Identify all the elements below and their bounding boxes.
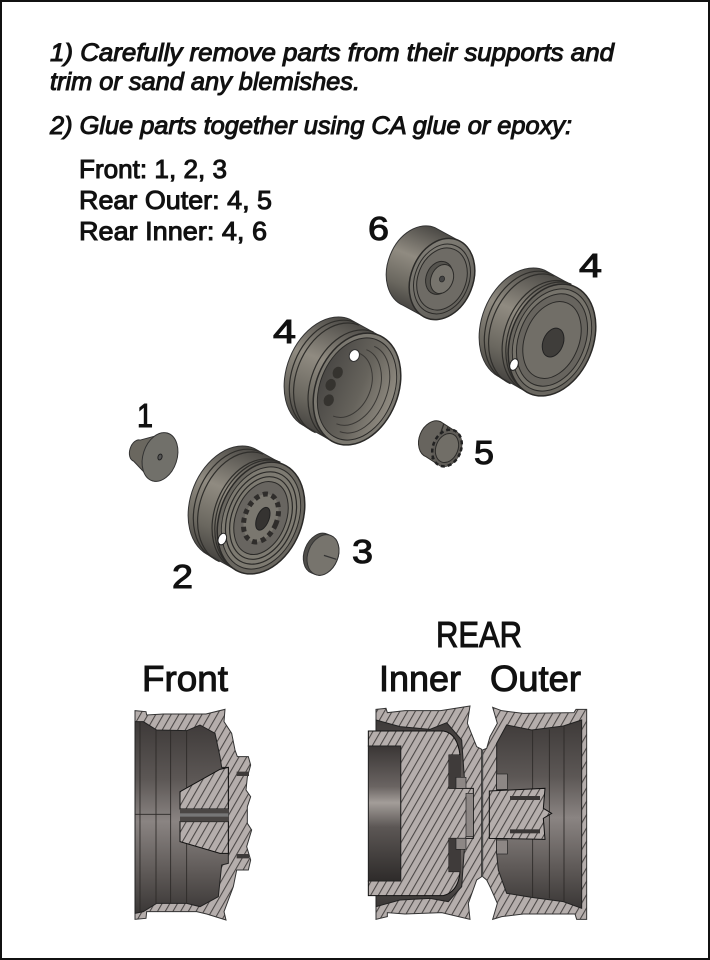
glue groups list: Rear Inner: 4, 6 [79, 216, 267, 246]
label 5: 5 [474, 434, 494, 471]
part 4: rear wheel, face side [462, 255, 613, 409]
front wheel cross-section [135, 709, 252, 920]
heading Front: Front [142, 658, 228, 699]
step 2 text: 2) Glue parts together using CA glue or epoxy: [49, 112, 572, 140]
rear hub section [489, 788, 552, 839]
part 1: front cone [123, 424, 184, 486]
label 6: 6 [368, 210, 389, 247]
heading Inner: Inner [379, 658, 461, 699]
glue groups list [79, 154, 272, 246]
heading REAR: REAR [436, 614, 522, 655]
label 3: 3 [352, 533, 373, 570]
step 1 text [50, 39, 615, 96]
glue groups list: Front: 1, 2, 3 [79, 154, 227, 184]
label 1: 1 [137, 397, 153, 434]
heading Outer: Outer [490, 658, 581, 699]
open rim and interior [297, 320, 417, 458]
step 1 text: trim or sand any blemishes. [50, 68, 360, 96]
part 3: front cap [298, 528, 345, 580]
label 4 right: 4 [579, 247, 602, 284]
part 5: outer hub [412, 416, 468, 471]
rear inner wheel cross-section [368, 706, 482, 919]
part number labels [137, 210, 602, 595]
label 2: 2 [172, 558, 193, 595]
part 4: rear wheel, open side [267, 304, 418, 458]
glue groups list: Rear Outer: 4, 5 [79, 185, 272, 215]
step 1 text: 1) Carefully remove parts from their supports and [50, 39, 615, 67]
section headings [142, 614, 581, 699]
rear insert section [368, 731, 473, 896]
instructions text block [49, 39, 615, 246]
rear outer wheel cross-section [483, 707, 587, 919]
part 6: inner insert [373, 216, 488, 330]
label 4 left: 4 [273, 313, 296, 350]
part 2: front wheel [171, 433, 322, 587]
